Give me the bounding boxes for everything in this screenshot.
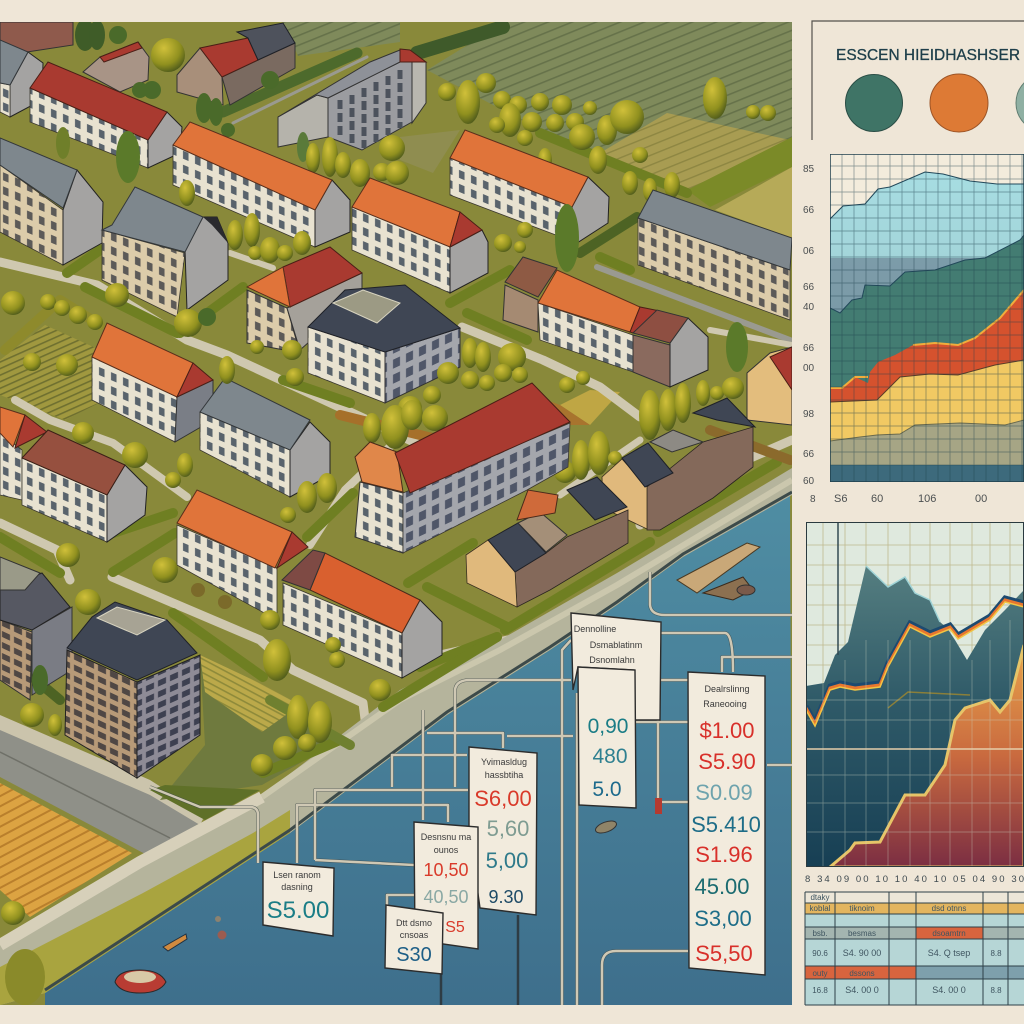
building: tan right edge xyxy=(747,347,792,425)
river xyxy=(45,495,792,1005)
plot xyxy=(806,522,1024,867)
building: riverside house right xyxy=(602,398,755,530)
trees: foreground xyxy=(1,543,391,1005)
table text: dsd otnns xyxy=(932,904,966,913)
callout: price sign 4: 9.30 xyxy=(488,887,524,907)
y axis labels: 66 xyxy=(803,205,815,216)
callout: price sign 7: Raneooing xyxy=(703,699,747,709)
building: orange left xyxy=(92,323,213,442)
middle row buildings xyxy=(0,122,792,320)
title: ESSCEN HIEIDHASHSER xyxy=(836,47,1020,64)
x axis labels: 8 34 09 00 10 10 40 10 05 04 90 30 xyxy=(805,874,1024,885)
y axis labels: 06 xyxy=(803,246,815,257)
building: grey centre xyxy=(200,378,330,497)
lower buildings xyxy=(0,383,755,778)
building: red roof upper left xyxy=(30,62,182,168)
upper buildings xyxy=(0,22,426,168)
callout: price sign 6: 480 xyxy=(592,745,628,768)
callout: price sign 3: 40,50 xyxy=(423,887,469,907)
building: grey left xyxy=(0,138,103,265)
table text: outy xyxy=(812,969,828,978)
callout: price sign 2 xyxy=(385,905,443,974)
building: riverside house left xyxy=(466,477,628,607)
callout: price sign 2: cnsoas xyxy=(400,930,429,940)
chart: stacked area xyxy=(803,154,1024,505)
callout: price sign 4: 5,00 xyxy=(486,848,528,873)
table text: S4. 90 00 xyxy=(843,948,881,958)
table text: tiknoim xyxy=(849,904,875,913)
building: grey right xyxy=(638,190,792,320)
y axis labels: 66 xyxy=(803,343,815,354)
table text: S4. Q tsep xyxy=(928,948,970,958)
lawn plot beside tower xyxy=(160,655,340,800)
building: top left grey house xyxy=(0,40,43,117)
callout: price sign 7: S5.90 xyxy=(698,749,756,774)
x axis labels xyxy=(810,493,987,505)
y axis labels xyxy=(803,164,815,487)
table text: 16.8 xyxy=(812,986,828,995)
farm fields xyxy=(0,22,792,425)
y axis labels: 66 xyxy=(803,282,815,293)
table text: bsb. xyxy=(812,929,828,938)
building: house top xyxy=(177,23,295,105)
lower-middle buildings xyxy=(92,247,792,497)
callout: price sign 7: $1.00 xyxy=(699,718,755,743)
callout: price sign 5: Dennolline xyxy=(574,624,616,634)
callout: price sign 4: 5,60 xyxy=(487,816,529,841)
building: small beige house xyxy=(83,42,149,92)
building: flat roof block xyxy=(308,285,460,403)
callout: price sign 2: S30 xyxy=(396,944,432,966)
table text: 90.6 xyxy=(812,949,828,958)
callout: price sign 4: Yvimasldug xyxy=(481,757,527,767)
building: orange centre xyxy=(352,178,488,293)
road and wheat field xyxy=(0,655,340,917)
building: dark tower xyxy=(65,602,200,778)
building: top corner xyxy=(0,22,73,52)
callout: price sign 7: S5,50 xyxy=(695,941,753,966)
x axis labels: 8 xyxy=(810,494,816,505)
x axis labels: S6 xyxy=(834,493,847,505)
x axis labels: 106 xyxy=(918,493,936,505)
table text: dsoamtrn xyxy=(932,929,966,938)
y axis labels: 40 xyxy=(803,302,815,313)
callout: price sign 5: Dsnomlahn xyxy=(589,655,635,665)
building: grey apartments xyxy=(278,49,426,150)
y axis labels: 98 xyxy=(803,409,815,420)
boats xyxy=(115,585,755,993)
table text: S4. 00 0 xyxy=(845,985,879,995)
callout: price sign 1: Lsen ranom xyxy=(273,870,321,880)
callout: price sign 1 xyxy=(263,862,334,936)
callout: price sign 7: S1.96 xyxy=(695,842,753,867)
callout: price sign 7: Dealrslinng xyxy=(704,684,750,694)
trees: behind middle row xyxy=(1,19,776,376)
panel: isometric neighbourhood map xyxy=(0,19,792,1005)
y axis labels: 66 xyxy=(803,449,815,460)
panel: heading and legend xyxy=(812,21,1024,140)
building: orange long xyxy=(173,122,350,247)
callout: price sign 4 xyxy=(469,747,537,915)
chart: mountain and line xyxy=(805,522,1024,885)
callout: price sign 4: S6,00 xyxy=(474,786,532,811)
callout: price sign 4: hassbtiha xyxy=(485,770,523,780)
paths xyxy=(0,57,792,735)
callout: price sign 1: dasning xyxy=(281,882,313,892)
callout: price sign 7: 45.00 xyxy=(694,874,750,899)
callout: price sign 3 xyxy=(414,822,478,949)
frame lines xyxy=(812,21,1024,140)
building: red lower xyxy=(282,550,442,678)
building: red block xyxy=(247,247,362,353)
ground xyxy=(0,22,792,1005)
table text: 8.8 xyxy=(990,986,1002,995)
callout: price sign 3: 10,50 xyxy=(423,860,469,880)
x axis labels: 60 xyxy=(871,493,883,505)
table text: dtaky xyxy=(810,893,830,902)
building: long red block xyxy=(355,383,570,553)
callout: price sign 7 xyxy=(688,672,765,975)
callout: price sign 1: S5.00 xyxy=(267,897,329,924)
x axis labels: 00 xyxy=(975,493,987,505)
callout: price sign 7: S0.09 xyxy=(695,780,753,805)
quay xyxy=(0,468,792,1005)
callout: price sign 6: 5.0 xyxy=(592,778,622,801)
building: orange right block xyxy=(503,257,708,387)
building: red left cluster xyxy=(0,407,147,542)
legend circle: orange xyxy=(930,74,988,132)
table text: koblal xyxy=(810,904,831,913)
hedges xyxy=(0,27,790,773)
callout: price sign 7: S5.410 xyxy=(691,812,761,837)
connector pipes xyxy=(150,572,792,1005)
callout: price sign 7: S3,00 xyxy=(694,906,752,931)
callout: price sign 5: Dsmablatinm xyxy=(590,640,642,650)
callout: price sign 6: 0,90 xyxy=(588,715,628,738)
plot xyxy=(830,154,1024,482)
y axis labels: 60 xyxy=(803,476,815,487)
callout: price sign 3: S5 xyxy=(445,919,465,936)
legend circle: pale green xyxy=(1016,74,1024,132)
y axis labels: 85 xyxy=(803,164,815,175)
trees: central row xyxy=(56,127,579,337)
building: left tower xyxy=(0,557,72,700)
building: orange lower xyxy=(177,490,308,620)
legend circle: teal xyxy=(846,74,902,132)
trees: behind long red block xyxy=(72,322,748,523)
callout: price sign 3: ounos xyxy=(434,845,459,855)
table text xyxy=(810,893,1002,995)
table text: S4. 00 0 xyxy=(932,985,966,995)
table text: dssons xyxy=(849,969,875,978)
callout: price sign 6 xyxy=(578,667,636,808)
callout: price sign 3: Desnsnu ma xyxy=(421,832,471,842)
table text: 8.8 xyxy=(990,949,1002,958)
building: grey centre left xyxy=(102,187,228,317)
table text: besmas xyxy=(848,929,876,938)
data table xyxy=(805,892,1024,1005)
dock xyxy=(677,543,760,600)
y axis labels: 00 xyxy=(803,363,815,374)
table rows xyxy=(805,892,1024,1005)
building: orange top centre xyxy=(450,130,609,243)
callout: price sign 2: Dtt dsmo xyxy=(396,918,432,928)
callout: price sign 5 xyxy=(571,613,661,720)
